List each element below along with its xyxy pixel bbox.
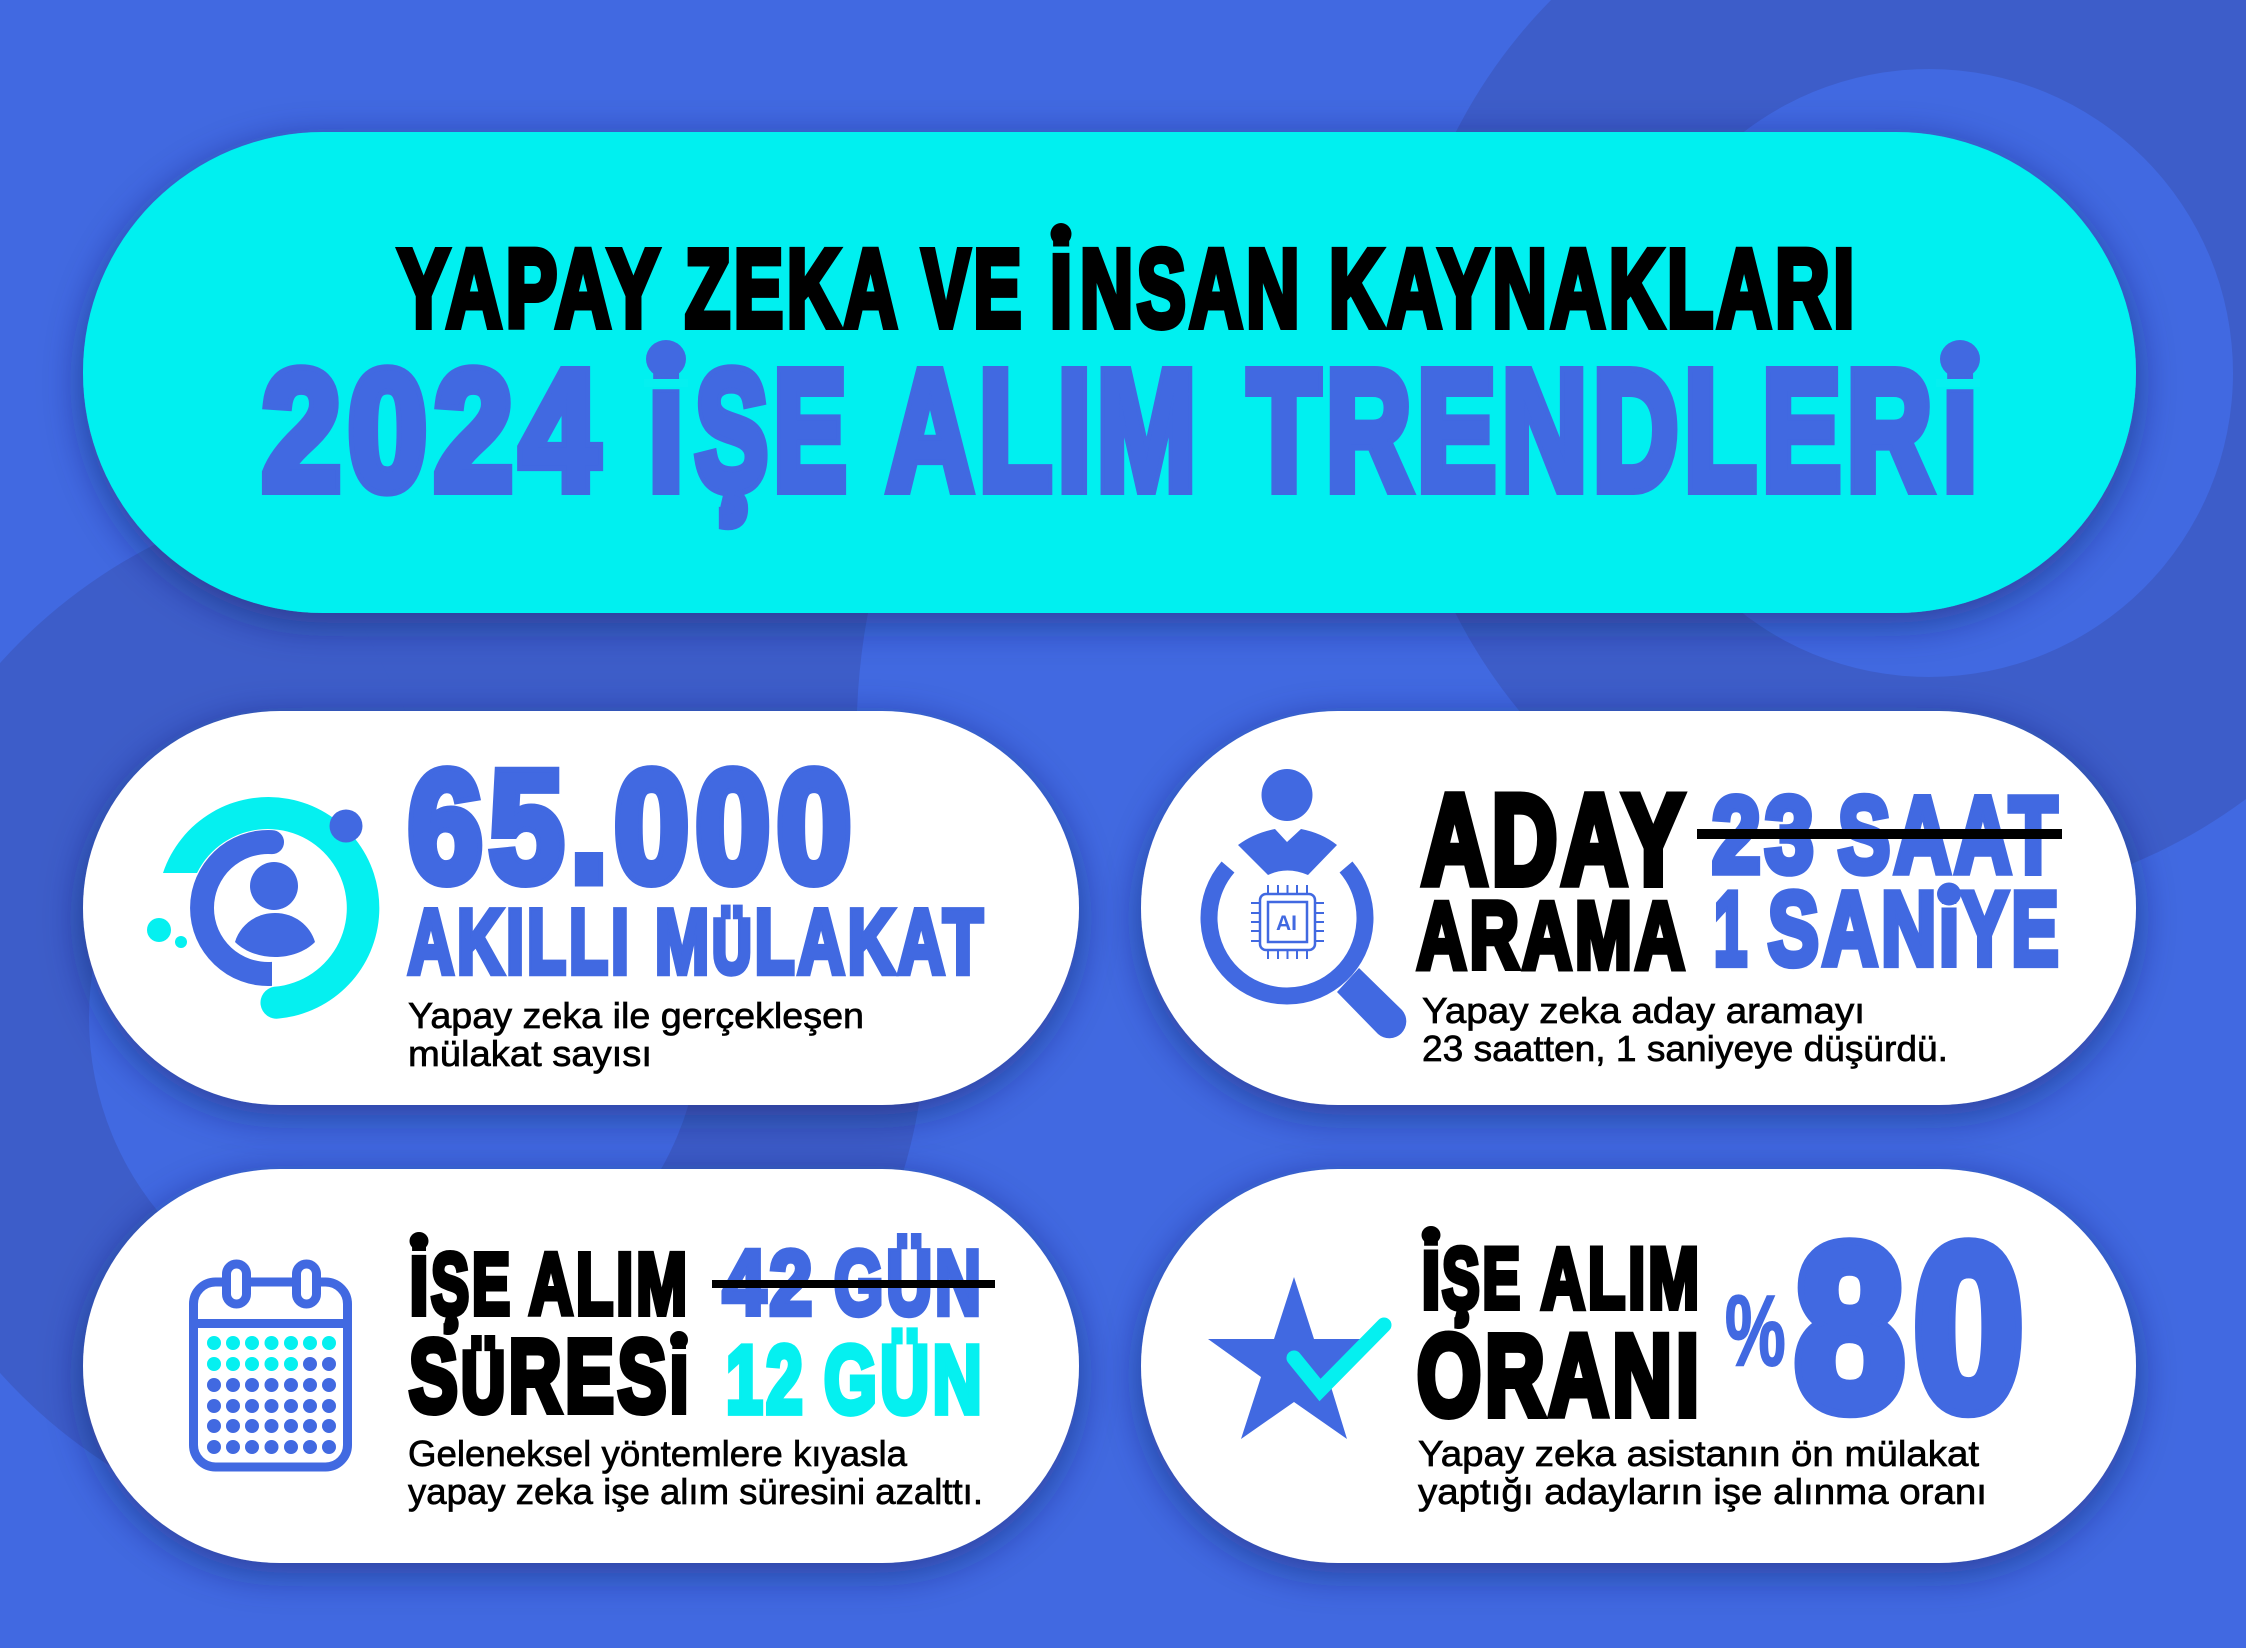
new value: 12 gun (726, 1326, 985, 1434)
new value: 12 gun: GÜN (824, 1326, 985, 1434)
heading (408, 892, 986, 993)
description: Yapay zeka asistanın ön mülakat (1418, 1433, 1979, 1474)
new value: 1 saniye: YE (1961, 872, 2062, 988)
title line 1 (398, 223, 1858, 354)
title line 2: TRENDLER (1248, 336, 1938, 526)
title line 1: VE (922, 228, 1025, 350)
panel: hiring rate (1141, 1169, 2136, 1563)
heading: orani: ORANI (1417, 1312, 1703, 1440)
icon: magnifier with person and AI chip: AI (1276, 912, 1297, 935)
old value: 23 saat struck through (1697, 774, 2062, 895)
description: 23 saatten, 1 saniyeye düşürdü. (1422, 1028, 1948, 1069)
title line 2: İ (646, 361, 686, 523)
old value: 42 gun struck through: 42 (723, 1233, 816, 1334)
new value: 1 saniye: 1 (1714, 872, 1750, 988)
old value: 23 saat struck through: 23 (1712, 774, 1818, 895)
description: Geleneksel yöntemlere kıyasla (408, 1433, 908, 1474)
heading: suresi: SÜRES (409, 1318, 670, 1434)
title line 1: KAYNAKLARI (1329, 228, 1858, 350)
panel: candidate search (1141, 711, 2136, 1105)
title line 1: YAPAY (398, 228, 663, 350)
heading: ise alim: ALIM (1541, 1231, 1702, 1327)
heading: AKILLI (408, 892, 632, 993)
heading: ise alim: ŞE (1442, 1231, 1523, 1327)
heading: ise alim: ALIM (529, 1236, 690, 1333)
heading: MÜLAKAT (655, 892, 986, 993)
icon: calendar (189, 1264, 352, 1467)
title line 1: İ (1046, 230, 1076, 354)
title line 2: ŞE (695, 336, 852, 526)
new value: 1 saniye: SAN (1768, 872, 1940, 988)
title line 2 (262, 336, 1980, 526)
new value: 1 saniye: İ (1937, 890, 1961, 984)
big number: 80 (1795, 1198, 2033, 1458)
panel: hiring time (83, 1169, 1079, 1563)
description: yaptığı adayların işe alınma oranı (1418, 1471, 1987, 1512)
big number: 65.000 (408, 739, 858, 915)
heading: ise alim (1419, 1226, 1702, 1329)
new value: 1 saniye (1714, 872, 2062, 988)
description: Yapay zeka aday aramayı (1422, 990, 1865, 1031)
heading: ise alim: ŞE (431, 1236, 513, 1333)
title line 1: NSAN (1080, 228, 1303, 350)
heading: suresi: İ (667, 1338, 691, 1433)
old value: 23 saat struck through: SAAT (1838, 774, 2061, 895)
heading: ise alim (407, 1232, 690, 1335)
percent sign: % (1725, 1275, 1789, 1387)
description: Yapay zeka ile gerçekleşen (408, 995, 864, 1036)
heading: arama: ARAMA (1417, 883, 1688, 989)
description: yapay zeka işe alım süresini azalttı. (408, 1471, 983, 1512)
heading: aday: ADAY (1422, 768, 1688, 910)
old value: 42 gun struck through: GÜN (834, 1233, 984, 1334)
heading: ise alim: İ (1419, 1233, 1443, 1329)
description (1418, 1433, 1987, 1512)
description: mülakat sayısı (408, 1033, 652, 1074)
description (408, 995, 864, 1074)
title line 2: ALIM (887, 336, 1202, 526)
panel: title banner (83, 132, 2136, 613)
description (1422, 990, 1948, 1069)
icon: magnifier with person and AI chip (1209, 769, 1406, 1038)
description (408, 1433, 983, 1512)
title line 2: 2024 (262, 336, 606, 526)
icon: star with check (1208, 1277, 1384, 1439)
new value: 12 gun: 12 (726, 1326, 806, 1434)
icon: person in circular arcs (147, 797, 379, 1019)
heading: ise alim: İ (407, 1238, 431, 1335)
panel: 65.000 smart interviews (83, 711, 1079, 1105)
old value: 42 gun struck through (712, 1233, 995, 1334)
title line 2: İ (1940, 361, 1980, 523)
title line 1: ZEKA (685, 228, 901, 350)
